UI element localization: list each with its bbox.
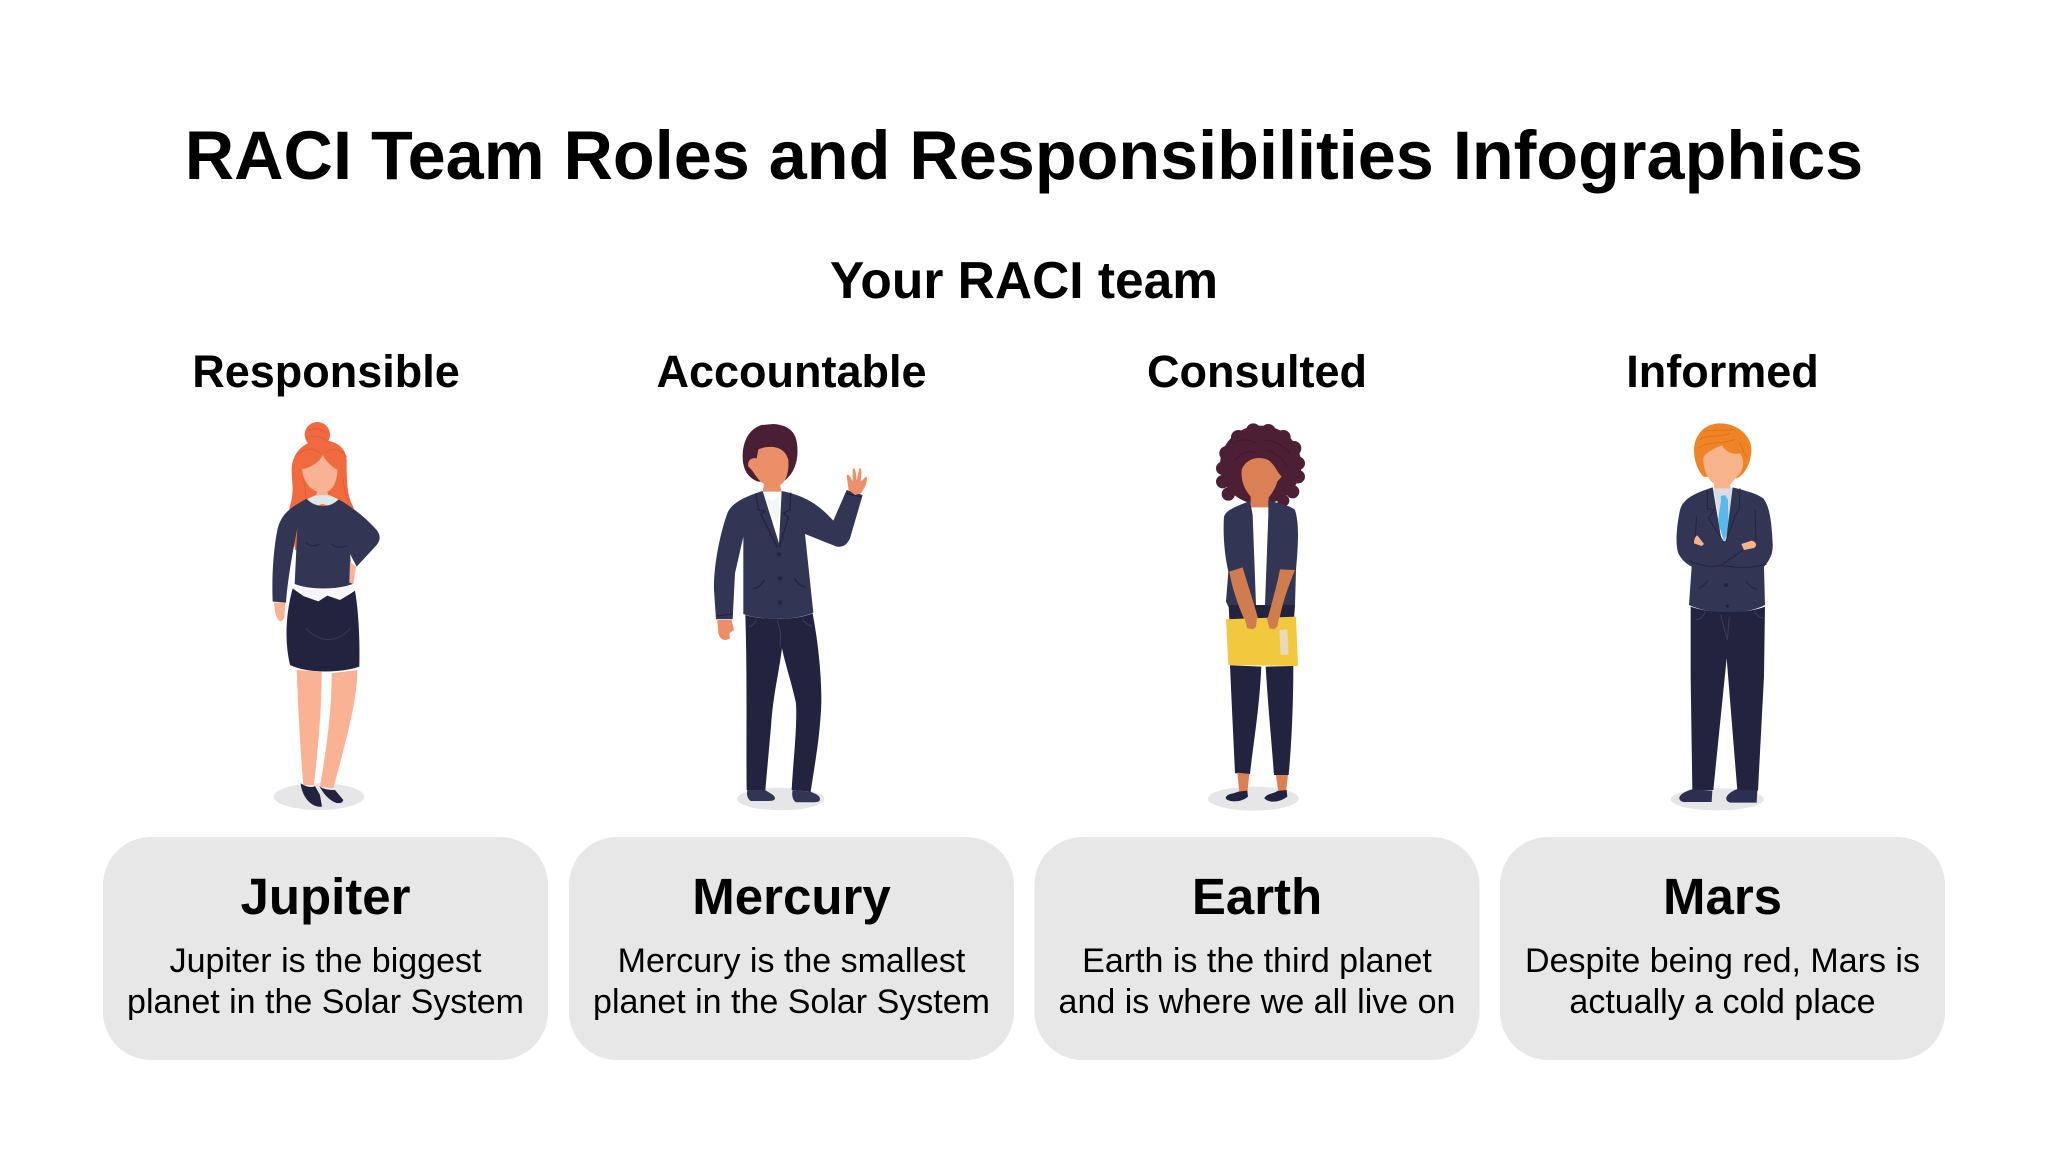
subtitle: Your RACI team — [830, 251, 1218, 309]
card description: Mercury: planet in the Solar System — [593, 983, 990, 1021]
role heading: Consulted: Consulted — [1147, 346, 1367, 397]
title: RACI Team Roles and Responsibilities Infographics — [185, 118, 1863, 194]
card: Jupiter — [103, 837, 548, 1060]
figure: woman with folder — [1208, 423, 1305, 811]
figure: man with crossed arms — [1671, 423, 1773, 810]
role heading: Accountable: Accountable — [656, 346, 927, 397]
card: Mercury — [569, 837, 1014, 1060]
figure: man waving — [714, 424, 867, 810]
card description: Mars: actually a cold place — [1569, 983, 1876, 1021]
card description: Jupiter: Jupiter is the biggest — [170, 942, 482, 980]
card name: Earth: Earth — [1192, 868, 1322, 925]
card description: Earth: Earth is the third planet — [1082, 942, 1432, 980]
card: Mars — [1500, 837, 1945, 1060]
card: Earth — [1034, 837, 1480, 1060]
card name: Mercury: Mercury — [692, 868, 891, 925]
card description: Mercury: Mercury is the smallest — [618, 942, 966, 980]
card description: Earth: and is where we all live on — [1059, 983, 1455, 1021]
card description: Jupiter: planet in the Solar System — [127, 983, 524, 1021]
role heading: Informed: Informed — [1626, 346, 1819, 397]
card name: Mars: Mars — [1663, 868, 1782, 925]
role heading: Responsible: Responsible — [192, 346, 460, 397]
card description: Mars: Despite being red, Mars is — [1525, 942, 1920, 980]
figure: woman with red hair — [272, 422, 380, 810]
card name: Jupiter: Jupiter — [240, 868, 411, 925]
